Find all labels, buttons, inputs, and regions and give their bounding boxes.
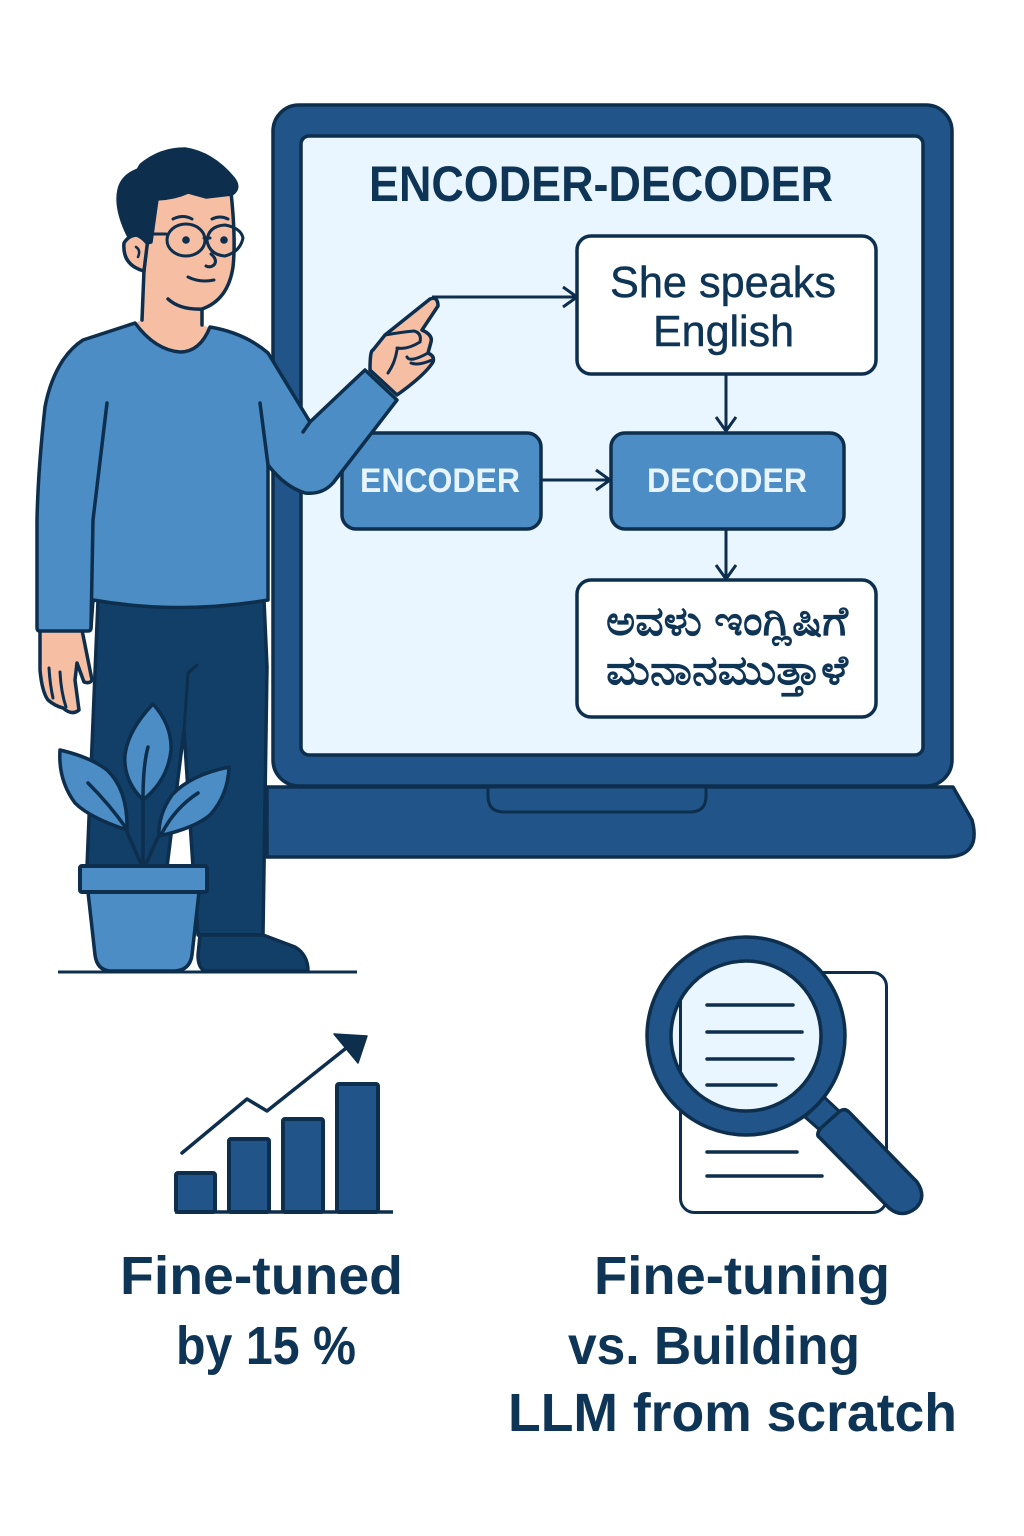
- document edge through lens: [679, 995, 682, 1075]
- caption: fine-tuned: Fine-tuned: [120, 1246, 403, 1306]
- arrow: input to decoder: [724, 374, 728, 431]
- arrow: finger to input: [432, 296, 577, 298]
- input box: [577, 236, 876, 374]
- finger lines: [385, 331, 432, 373]
- magnifier grip: [818, 1110, 922, 1214]
- arrow: encoder to decoder: [541, 478, 610, 482]
- pot body: [88, 892, 199, 971]
- arrow: decoder to output: [724, 529, 728, 579]
- shoe: [198, 935, 308, 971]
- left leaf: [60, 750, 127, 830]
- baseline: [175, 1210, 393, 1214]
- caption: fine-tuning vs building: [508, 1246, 957, 1443]
- hanging hand: [40, 630, 92, 713]
- icon: growth bar chart: [175, 1034, 393, 1212]
- lens glass: [670, 960, 822, 1112]
- neck and face: [135, 190, 234, 352]
- laptop notch: [488, 787, 706, 812]
- icon: magnifier over document: [647, 937, 922, 1214]
- laptop lid: [273, 105, 952, 786]
- leaf veins: [88, 747, 198, 833]
- top leaf: [125, 704, 171, 800]
- sweater creases: [91, 403, 310, 628]
- right lens and temples: [150, 225, 243, 256]
- inner ear: [136, 247, 139, 257]
- decoder box: [611, 433, 844, 529]
- ground line: [58, 970, 357, 974]
- output box: ಅವಳು ಇಂಗ್ಲಿಷಿಗೆ: [606, 598, 849, 647]
- ear: [124, 235, 148, 271]
- potted plant: [60, 704, 229, 971]
- input box: She speaks: [610, 258, 836, 307]
- laptop base: [267, 787, 974, 857]
- encoder box: ENCODER: [360, 462, 520, 500]
- left lens: [167, 224, 205, 256]
- pot rim: [80, 866, 207, 892]
- output box: ಮನಾನಮುತ್ತಾಳೆ: [606, 647, 850, 698]
- right leaf: [159, 767, 229, 836]
- trend line: [182, 1049, 345, 1153]
- face details: [173, 216, 228, 281]
- laptop: [267, 105, 974, 857]
- hair: [118, 149, 237, 243]
- decoder box: DECODER: [647, 462, 807, 500]
- caption: fine-tuning vs building: LLM from scratch: [508, 1383, 957, 1443]
- output box: [577, 580, 876, 717]
- pointing hand: [370, 298, 438, 395]
- caption: fine-tuning vs building: vs. Building: [568, 1316, 860, 1376]
- eyes: [182, 236, 228, 244]
- caption: fine-tuned: by 15 %: [176, 1316, 356, 1376]
- sweater: [37, 323, 397, 631]
- magnifier neck: [805, 1097, 840, 1132]
- face outline: [142, 192, 234, 325]
- flow diagram: [342, 236, 876, 717]
- document: [680, 972, 886, 1212]
- hand finger lines: [49, 668, 66, 707]
- arrowhead: [334, 1034, 367, 1063]
- glasses: [150, 224, 243, 256]
- bars: [176, 1084, 378, 1212]
- magnifier ring: [647, 937, 845, 1135]
- caption: fine-tuning vs building: Fine-tuning: [594, 1246, 890, 1306]
- pants: [87, 600, 267, 935]
- document lines: [707, 1005, 822, 1176]
- caption: fine-tuned: [120, 1246, 403, 1376]
- laptop screen: [301, 136, 923, 755]
- diagram title: ENCODER-DECODER: [369, 156, 833, 212]
- encoder box: [342, 433, 541, 529]
- crotch line: [184, 665, 197, 730]
- person: [37, 149, 438, 971]
- plant stems: [127, 800, 158, 866]
- input box: English: [653, 307, 794, 356]
